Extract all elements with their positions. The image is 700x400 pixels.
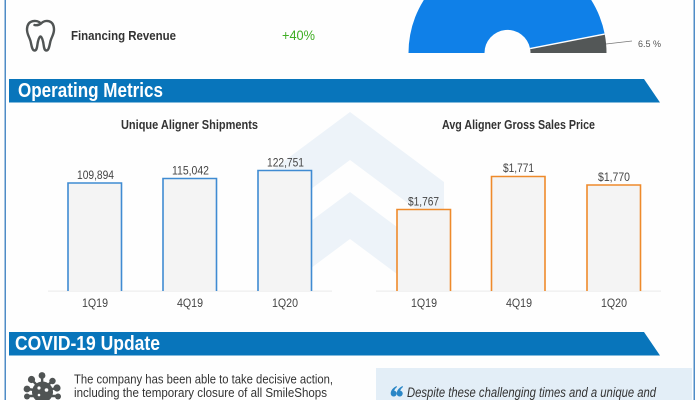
chart: Avg Aligner Gross Sales Price: $1,770 <box>598 170 630 184</box>
callout: quote <box>376 368 692 400</box>
chart: Unique Aligner Shipments: Unique Aligner Shipments <box>121 118 258 132</box>
chart: Avg Aligner Gross Sales Price: $1,771 <box>503 161 534 175</box>
watermark: chevrons <box>273 112 444 273</box>
text block: company action: including the temporary closure of all SmileShops <box>74 385 327 400</box>
label: Financing Revenue: Financing Revenue <box>71 28 176 43</box>
text block: company action <box>74 372 333 400</box>
icon: tooth <box>27 21 54 50</box>
donut chart: 6.5 % <box>638 39 662 50</box>
icon: virus <box>24 372 61 400</box>
banner: Operating Metrics <box>9 79 660 102</box>
banner: COVID-19 Update <box>9 332 660 356</box>
chart: Avg Aligner Gross Sales Price: 4Q19 <box>506 296 532 310</box>
chart: Unique Aligner Shipments: 1Q19 <box>82 296 108 310</box>
value: +40%: +40% <box>282 27 315 43</box>
chart: Avg Aligner Gross Sales Price: $1,767 <box>408 194 439 208</box>
donut chart <box>408 0 662 53</box>
chart: Unique Aligner Shipments: 4Q19 <box>177 296 203 310</box>
callout: quote: Despite these challenging times and a unique and <box>407 385 656 400</box>
chart: Unique Aligner Shipments: 122,751 <box>267 156 304 170</box>
chart: Avg Aligner Gross Sales Price: Avg Aligner Gross Sales Price <box>442 118 595 132</box>
chart: Unique Aligner Shipments <box>48 118 332 310</box>
banner: COVID-19 Update: COVID-19 Update <box>15 333 160 355</box>
chart: Unique Aligner Shipments: 1Q20 <box>272 296 298 310</box>
chart: Avg Aligner Gross Sales Price: 1Q20 <box>601 296 627 310</box>
chart: Avg Aligner Gross Sales Price <box>376 118 661 310</box>
chart: Avg Aligner Gross Sales Price: 1Q19 <box>411 296 437 310</box>
icon: quotation mark <box>391 386 403 397</box>
chart: Unique Aligner Shipments: 115,042 <box>172 164 209 178</box>
text block: company action: The company has been able to take decisive action, <box>74 372 333 386</box>
banner: Operating Metrics: Operating Metrics <box>18 80 163 102</box>
chart: Unique Aligner Shipments: 109,894 <box>77 168 114 182</box>
